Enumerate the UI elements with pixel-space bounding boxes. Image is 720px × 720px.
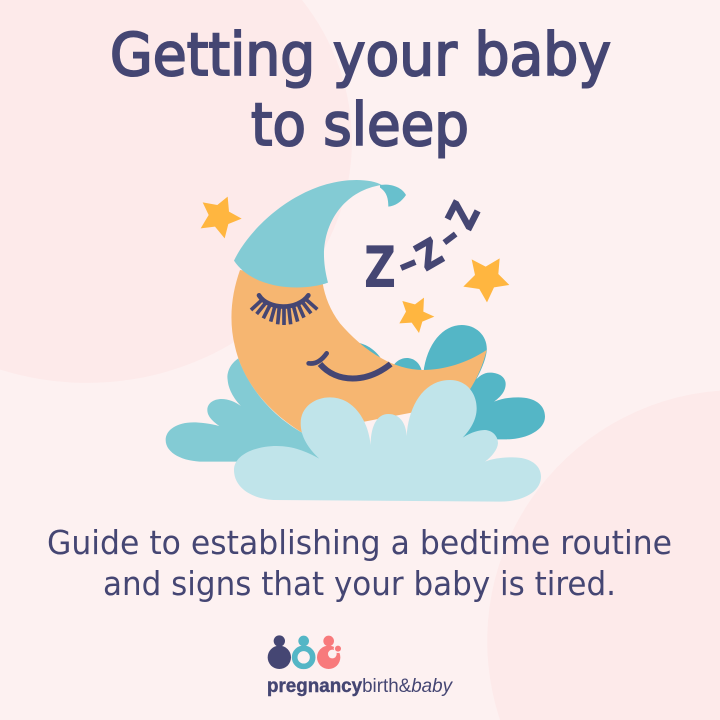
nightcap tip — [380, 185, 406, 207]
title: to sleep — [251, 90, 469, 159]
title — [110, 20, 611, 159]
sleeping letters Z-Z-Z: Z — [408, 230, 450, 279]
nightcap — [234, 180, 382, 287]
subtitle — [47, 524, 672, 603]
subtitle: and signs that your baby is tired. — [103, 565, 616, 603]
illustration: sleeping moon on clouds — [166, 180, 545, 502]
title: Getting your baby — [110, 20, 611, 89]
subtitle: Guide to establishing a bedtime routine — [47, 524, 672, 562]
sleeping letters Z-Z-Z: Z — [438, 195, 489, 237]
sleeping letters Z-Z-Z — [364, 195, 490, 301]
closed eye with lashes — [251, 295, 317, 325]
front cloud — [234, 380, 541, 502]
back cloud left — [166, 358, 327, 462]
stars — [201, 197, 509, 333]
back cloud right — [353, 325, 545, 439]
logo: pregnancy birth & baby — [267, 635, 453, 697]
logo icon: figures — [268, 635, 342, 669]
logo wordmark: pregnancybirth&baby — [267, 676, 453, 697]
moon — [231, 270, 487, 433]
smile — [309, 353, 391, 378]
sleeping letters Z-Z-Z: Z — [364, 235, 396, 301]
